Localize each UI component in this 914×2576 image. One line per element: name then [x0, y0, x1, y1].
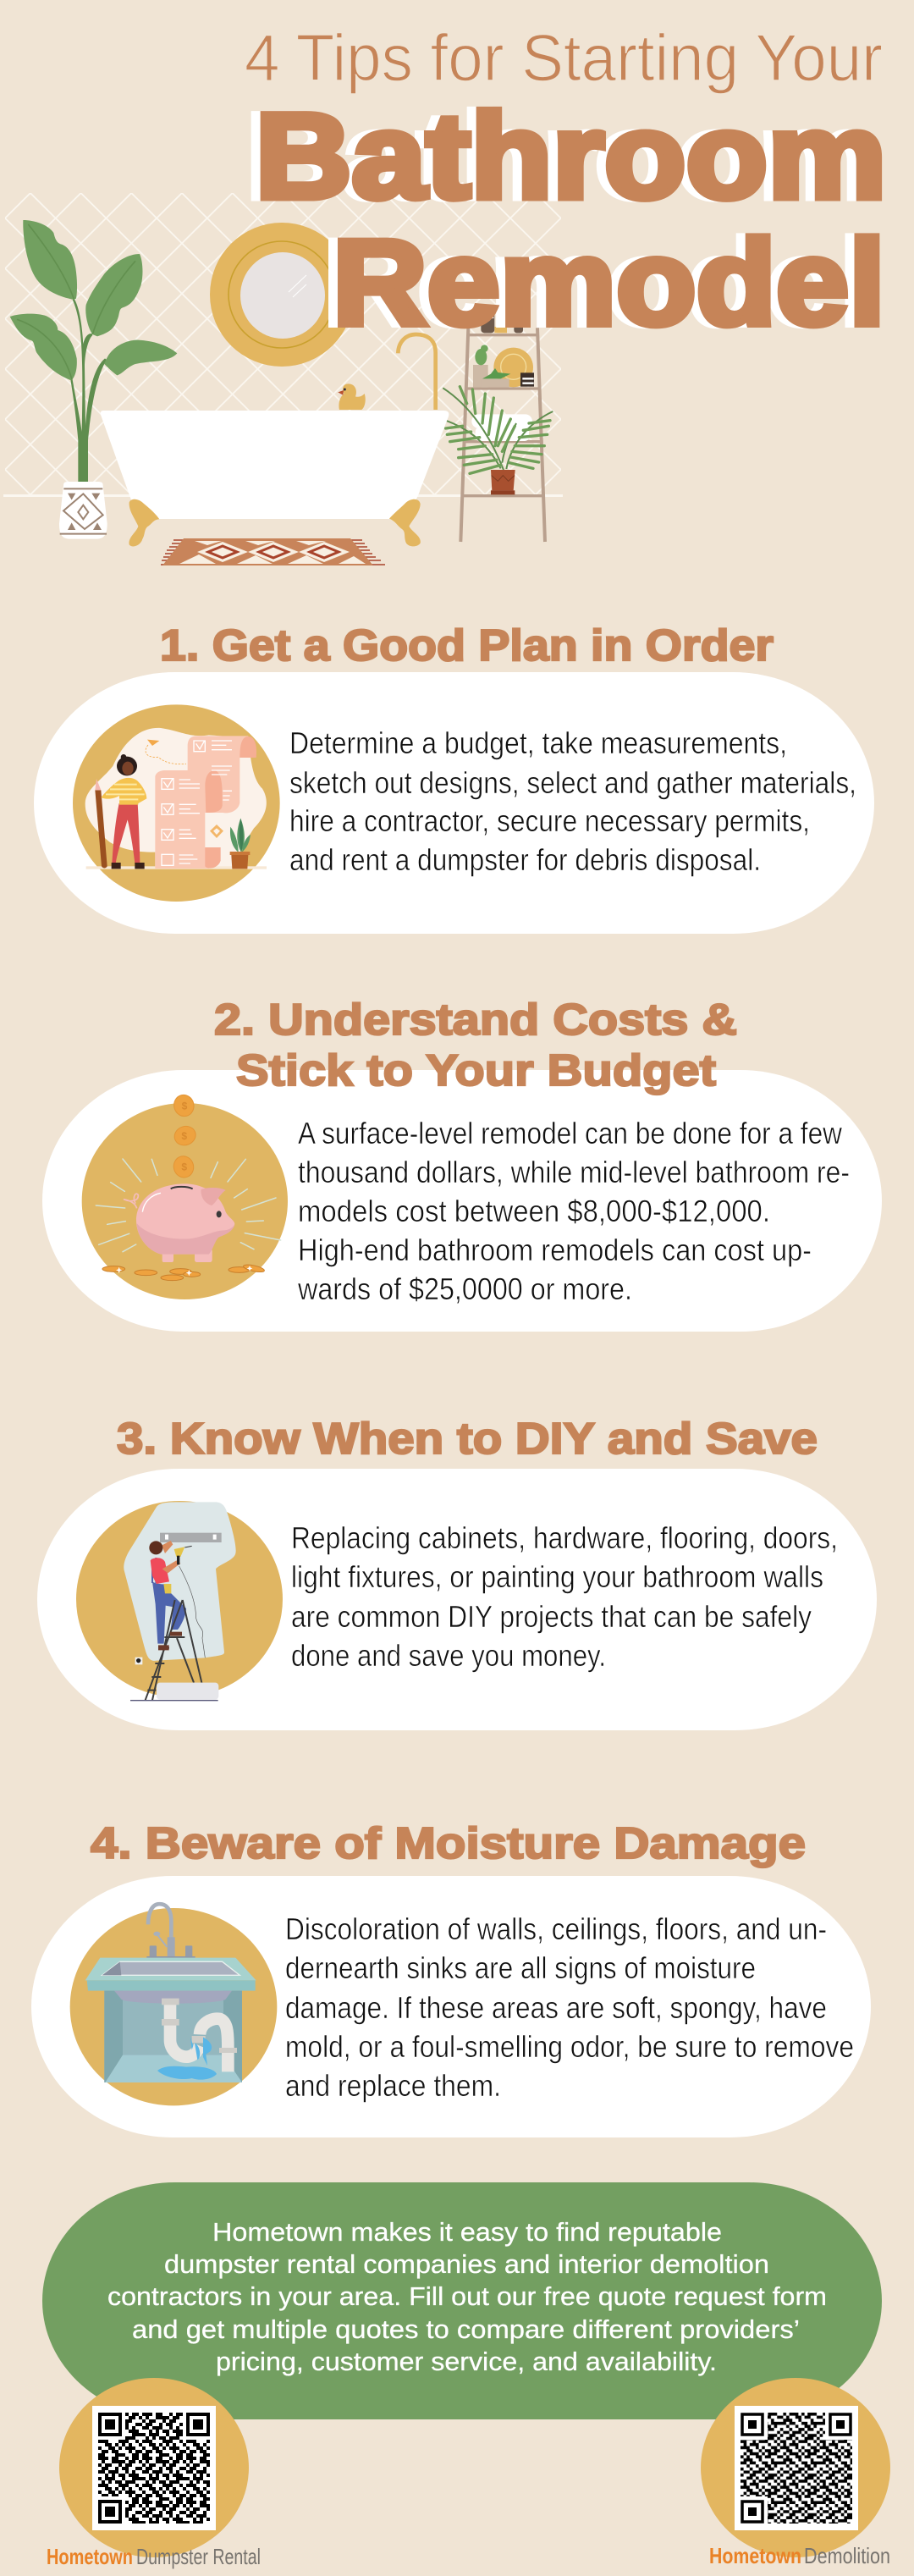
icon: planning checklist [73, 704, 280, 902]
body text: tip 4: dernearth sinks are all signs of moisture [285, 1950, 756, 1985]
call to action text: and get multiple quotes to compare different providers’ [132, 2314, 800, 2344]
heading: tip 2: Stick to Your Budget [236, 1046, 716, 1095]
icon: piggy bank: $ [182, 1100, 188, 1111]
title word shadow: Bathroom: Bathroom [245, 90, 877, 223]
label: Hometown [709, 2543, 801, 2568]
label [709, 2543, 890, 2568]
title word shadow: Remodel: Remodel [323, 216, 876, 350]
heading: tip 2 [214, 996, 737, 1095]
body text: tip 2: wards of $25,0000 or more. [297, 1271, 632, 1306]
QR code [92, 2406, 216, 2530]
icon: piggy bank: $ [181, 1161, 187, 1173]
icon: piggy bank: $ [181, 1130, 187, 1142]
rubber duck [338, 383, 366, 410]
body text: tip 1: hire a contractor, secure necessary permits, [289, 803, 810, 838]
title line: 4 Tips for Starting Your: 4 Tips for Starting Your [245, 20, 883, 95]
heading: tip 1: 1. Get a Good Plan in Order [160, 621, 774, 670]
label [47, 2544, 261, 2569]
body text: tip 3: done and save you money. [291, 1638, 606, 1673]
body text: tip 1 [289, 725, 856, 877]
gold circle [701, 2378, 890, 2557]
body text: tip 1: Determine a budget, take measurements, [289, 725, 787, 760]
panel: tip 2 [42, 996, 882, 1332]
body text: tip 2: A surface-level remodel can be done for a few [298, 1116, 843, 1150]
body text: tip 1: and rent a dumpster for debris disposal. [289, 842, 761, 877]
body text: tip 2: models cost between $8,000-$12,000. [298, 1194, 770, 1228]
heading: tip 2: 2. Understand Costs & [214, 996, 737, 1045]
QR block: Hometown Dumpster Rental [47, 2378, 261, 2569]
body text: tip 4: and replace them. [285, 2068, 501, 2103]
label: Demolition [804, 2543, 890, 2568]
panel: tip 1 [34, 621, 874, 934]
title word: Remodel: Remodel [333, 216, 885, 350]
body text: tip 3: light fixtures, or painting your bathroom walls [291, 1559, 823, 1594]
ladder shelf with items [438, 305, 553, 542]
body text: tip 2 [297, 1116, 850, 1306]
tub foot left [129, 499, 159, 546]
QR block: Hometown Demolition [701, 2378, 890, 2568]
call to action text: Hometown makes it easy to find reputable [212, 2217, 722, 2247]
green pill background [42, 2182, 882, 2419]
call to action text [107, 2217, 827, 2376]
body text: tip 4: damage. If these areas are soft, spongy, have [285, 1990, 827, 2025]
faucet [398, 334, 436, 410]
illustration: bathroom scene [3, 193, 563, 565]
call to action text: dumpster rental companies and interior demoltion [164, 2249, 769, 2279]
pill background [34, 672, 874, 934]
panel: call to action [42, 2182, 882, 2419]
icon: piggy bank [82, 1093, 288, 1299]
title [245, 20, 887, 350]
body text: tip 1: sketch out designs, select and gather materials, [289, 765, 856, 800]
pill background [42, 1070, 882, 1332]
heading: tip 3: 3. Know When to DIY and Save [117, 1415, 818, 1464]
wall tile pattern [5, 193, 561, 494]
icon: leaking sink [70, 1904, 277, 2105]
rug [161, 538, 385, 565]
body text: tip 3: Replacing cabinets, hardware, flooring, doors, [291, 1520, 838, 1555]
gold circle [59, 2378, 249, 2557]
body text: tip 2: thousand dollars, while mid-level bathroom re- [298, 1155, 850, 1189]
body text: tip 3: are common DIY projects that can be safely [291, 1599, 812, 1634]
body text: tip 4: Discoloration of walls, ceilings, floors, and un- [285, 1911, 827, 1946]
pill background [31, 1876, 871, 2137]
banana plant [10, 220, 177, 539]
bathtub [101, 411, 449, 519]
round mirror [210, 223, 354, 367]
pill background [37, 1469, 877, 1730]
body text: tip 3 [291, 1520, 838, 1673]
heading: tip 4: 4. Beware of Moisture Damage [91, 1819, 806, 1868]
label: Dumpster Rental [136, 2544, 261, 2569]
tub foot right [389, 499, 421, 546]
panel: tip 4 [31, 1819, 871, 2137]
QR code [735, 2406, 858, 2530]
body text: tip 4: mold, or a foul-smelling odor, be sure to remove [285, 2029, 854, 2064]
call to action text: pricing, customer service, and availability. [216, 2347, 717, 2376]
body text: tip 2: High-end bathroom remodels can cost up- [298, 1233, 812, 1267]
body text: tip 4 [285, 1911, 854, 2103]
plant pot [59, 482, 107, 539]
panel: tip 3 [37, 1415, 877, 1730]
icon: worker on ladder [76, 1501, 283, 1701]
title word: Bathroom: Bathroom [256, 90, 887, 223]
call to action text: contractors in your area. Fill out our free quote request form [107, 2281, 827, 2311]
floor line [3, 494, 563, 497]
label: Hometown [47, 2544, 133, 2569]
